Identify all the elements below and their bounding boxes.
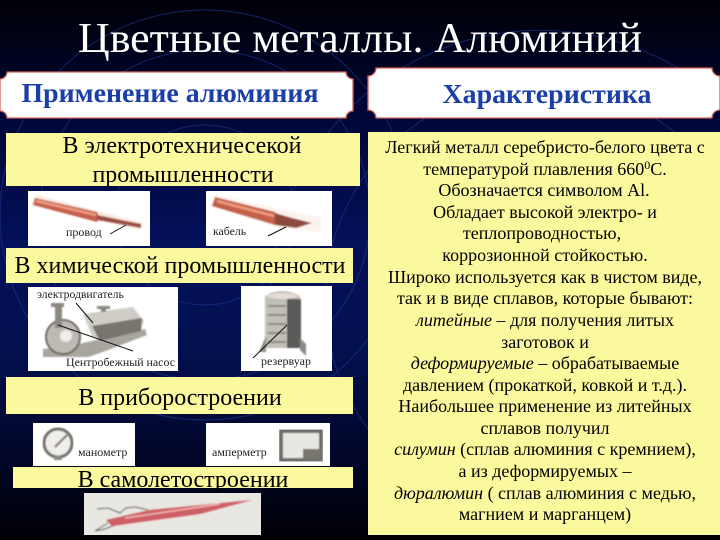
image: wire: провод (66, 225, 102, 239)
panel: characteristics text: 0 (644, 158, 650, 172)
image: wire (28, 191, 150, 246)
image: aircraft (84, 493, 261, 535)
panel: electrical industry (6, 133, 360, 188)
panel: characteristics text: силумин (сплав алюминия с кремнием), (394, 439, 696, 460)
panel: application header: Применение алюминия (22, 78, 318, 108)
panel: chemical industry: В химической промышленности (14, 253, 346, 279)
panel: characteristics text: С. (650, 159, 667, 179)
panel: characteristics text: температурой плавления 660 (423, 159, 644, 179)
panel: characteristics text: а из деформируемых – (458, 461, 633, 481)
panel: characteristics text: литейные – для получения литых (415, 310, 674, 330)
panel: characteristics text: коррозионной стойкостью. (442, 245, 648, 265)
image: pump and motor: Центробежный насос (66, 355, 175, 369)
panel: characteristics text: теплопроводностью, (463, 223, 621, 243)
panel: electrical industry: промышленности (92, 162, 274, 188)
image: cable (206, 191, 332, 246)
panel: characteristics text (368, 132, 720, 535)
image: ammeter: амперметр (212, 445, 267, 459)
panel: electrical industry: В электротехничесекой (62, 133, 302, 159)
panel: characteristics text: сплавов получил (480, 418, 610, 438)
panel: characteristics text: Обладает высокой электро- и (433, 202, 657, 222)
panel: characteristics text: деформируемые – обрабатываемые (411, 353, 679, 373)
panel: instrument making (6, 377, 353, 414)
image: manometer (33, 423, 135, 466)
image: ammeter (206, 423, 330, 466)
image: cable: кабель (213, 224, 247, 238)
panel: instrument making: В приборостроении (78, 385, 282, 411)
image: pump and motor (28, 287, 178, 371)
panel: characteristics text: Широко используется как в чистом виде, (388, 267, 702, 287)
panel: characteristics text: магнием и марганцем) (459, 504, 631, 525)
image: tank (241, 286, 332, 371)
title: Цветные металлы. Алюминий (78, 16, 642, 62)
panel: characteristics header: Характеристика (442, 79, 652, 109)
panel: characteristics text: Обозначается символом Al. (438, 180, 650, 200)
panel: characteristics text: дюралюмин ( сплав алюминия с медью, (394, 483, 696, 504)
panel: aircraft construction (13, 467, 353, 493)
panel: characteristics header (368, 68, 720, 118)
panel: aircraft construction: В самолетостроении (78, 467, 289, 493)
image: manometer: манометр (78, 445, 127, 459)
panel: characteristics text: Легкий металл серебристо-белого цвета с (385, 137, 705, 157)
image: tank: резервуар (261, 354, 311, 368)
image: pump and motor: электродвигатель (37, 288, 124, 301)
panel: characteristics text: Наибольшее применение из литейных (398, 396, 692, 416)
panel: characteristics text: заготовок и (501, 332, 589, 352)
panel: characteristics text: так и в виде сплавов, которые бывают: (397, 288, 693, 308)
panel: application header (0, 72, 353, 118)
panel: characteristics text: давлением (прокаткой, ковкой и т.д.). (403, 375, 687, 396)
